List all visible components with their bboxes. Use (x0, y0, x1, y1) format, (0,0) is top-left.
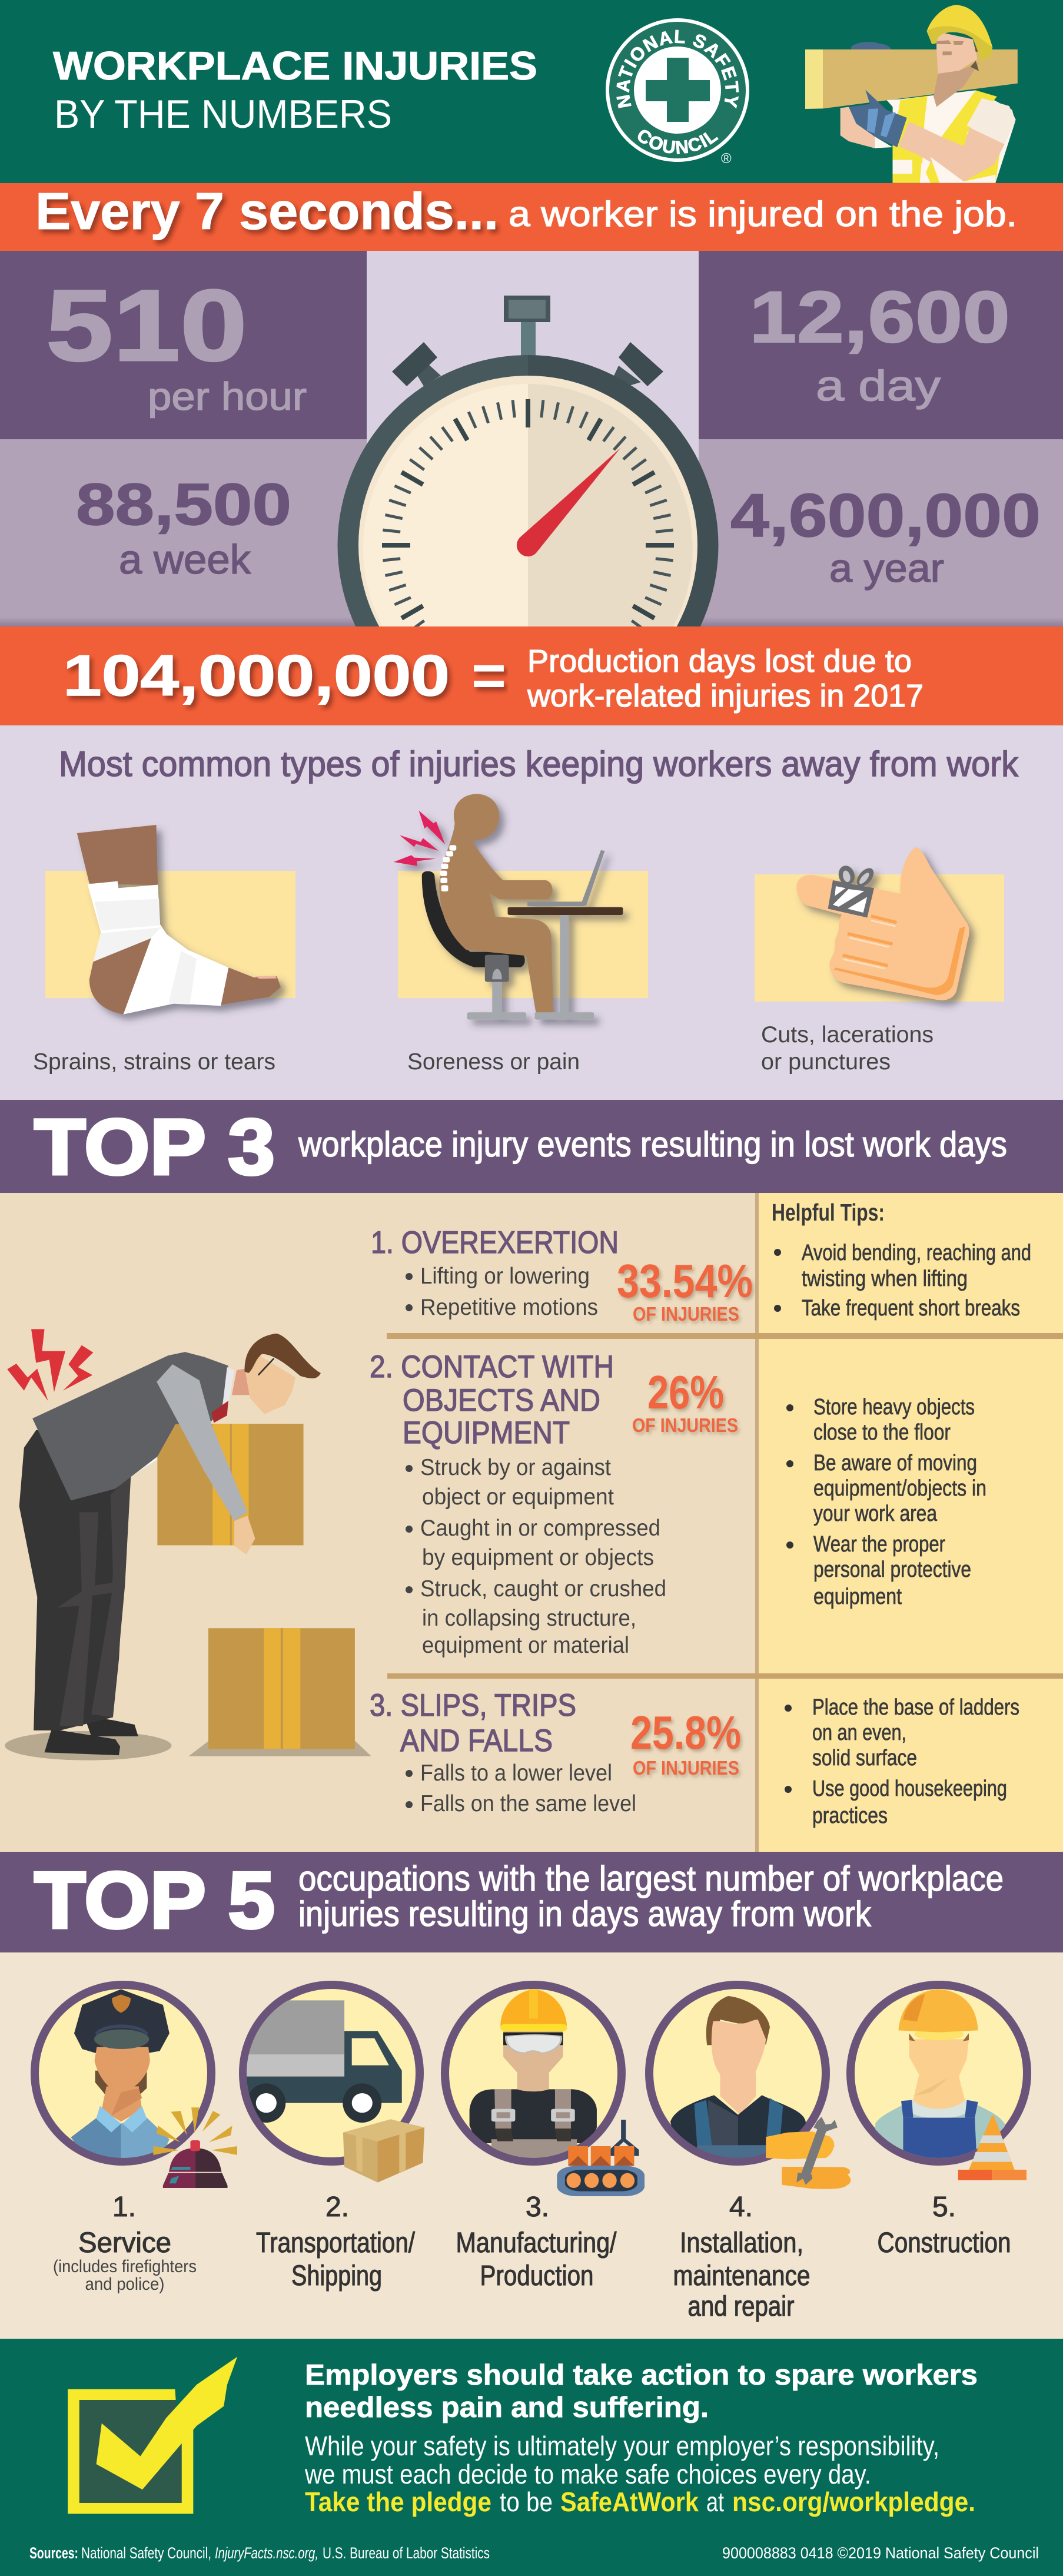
icon: service bell (153, 2107, 237, 2188)
event 2: contact with objects: object or equipment (422, 1484, 614, 1510)
event 2: contact with objects: Struck, caught or crushed (420, 1576, 666, 1602)
stat: 12,600 a day (749, 277, 1010, 410)
panel: top 5 occupations (0, 1952, 1063, 2339)
call to action text: nsc.org/workpledge. (732, 2487, 975, 2517)
heading: Most common types of injuries keeping workers away from work (59, 744, 1019, 784)
tips for overexertion: Helpful Tips: (772, 1199, 885, 1226)
stat: 510 per hour: 510 (46, 269, 247, 382)
copyright: 900008883 0418 ©2019 National Safety Council (722, 2544, 1039, 2562)
event 2: contact with objects: 26% (647, 1366, 724, 1418)
tips for contact: equipment (813, 1584, 902, 1609)
label: Shipping (291, 2260, 382, 2292)
illustration: man lifting box (5, 1329, 371, 1761)
event 3: slips, trips and falls: Falls on the same level (420, 1791, 636, 1816)
occupation 2: transportation (240, 1985, 424, 2292)
tips for overexertion: Take frequent short breaks (802, 1296, 1020, 1321)
sources: National Safety Council, (81, 2544, 211, 2562)
banner: 104,000,000 production days lost: work-related injuries in 2017 (527, 678, 924, 714)
banner: top 3: workplace injury events resulting in lost work days (298, 1125, 1007, 1164)
call to action text (304, 2359, 978, 2517)
call to action text: Take the pledge (305, 2487, 491, 2517)
event 3: slips, trips and falls: Falls to a lower level (420, 1761, 612, 1786)
tips for contact: personal protective (813, 1557, 971, 1582)
label: and repair (687, 2291, 795, 2322)
label: Production (480, 2260, 593, 2292)
tips for contact: equipment/objects in (813, 1476, 986, 1501)
icon: gloved hands with wrench (766, 2117, 851, 2189)
occupation 5: construction (851, 1985, 1027, 2259)
label: Installation, (680, 2227, 803, 2259)
sources: Sources: (29, 2544, 78, 2562)
title: WORKPLACE INJURIES (53, 44, 537, 88)
caption: cuts: Cuts, lacerations (761, 1022, 934, 1047)
logo: National Safety Council: NATIONAL SAFETY (616, 29, 739, 108)
event 1: overexertion: Repetitive motions (420, 1295, 598, 1320)
tips for slips: Use good housekeeping (812, 1776, 1007, 1801)
icon: conveyor belt (557, 2120, 645, 2196)
call to action text: While your safety is ultimately your employer’s responsibility, (305, 2431, 939, 2461)
sources (29, 2544, 490, 2562)
icon: bandaged foot (77, 825, 281, 1015)
event 1: overexertion: Lifting or lowering (420, 1264, 590, 1289)
label (256, 2192, 416, 2292)
banner: 104,000,000 production days lost: Production days lost due to (527, 644, 912, 679)
label: 2. (325, 2192, 349, 2223)
banner: every 7 seconds (0, 182, 1063, 251)
stat: 88,500 a week: 88,500 (76, 472, 291, 538)
label: Transportation/ (256, 2227, 416, 2259)
stat: 12,600 a day: 12,600 (749, 277, 1010, 358)
tips for contact: Be aware of moving (813, 1451, 977, 1476)
stat: 4,600,000 a year (730, 482, 1041, 591)
sources: InjuryFacts.nsc.org, (215, 2544, 318, 2562)
tips for contact: Store heavy objects (813, 1395, 975, 1420)
label: Construction (877, 2227, 1011, 2259)
event 1: overexertion: 1. OVEREXERTION (371, 1225, 619, 1260)
banner: top 5: injuries resulting in days away from work (298, 1894, 872, 1934)
occupation 3: manufacturing (445, 1985, 645, 2292)
stat: 12,600 a day: a day (816, 363, 941, 410)
tips for contact (786, 1395, 986, 1609)
logo: National Safety Council: COUNCIL (638, 130, 719, 154)
illustration: worker carrying beam (805, 5, 1018, 183)
label (673, 2192, 810, 2322)
helpful tips background (755, 1193, 1063, 1852)
banner: top 5: occupations with the largest number of workplace (298, 1859, 1004, 1898)
stat: 88,500 a week: a week (119, 536, 251, 582)
tips for slips: practices (812, 1803, 888, 1828)
label: 3. (526, 2192, 549, 2223)
icon background panels (45, 871, 1004, 1002)
sources: U.S. Bureau of Labor Statistics (323, 2544, 490, 2562)
panel: most common injury types (0, 725, 1063, 1100)
label (456, 2192, 617, 2292)
event 2: contact with objects: 2. CONTACT WITH (370, 1350, 614, 1384)
event 3: slips, trips and falls: AND FALLS (400, 1723, 553, 1758)
banner: top 5 (0, 1852, 1063, 1952)
event 3: slips, trips and falls (370, 1688, 741, 1816)
banner: 104,000,000 production days lost: = (471, 643, 506, 708)
label: (includes firefighters (53, 2257, 197, 2276)
banner: 104,000,000 production days lost: 104,000,000 (63, 643, 450, 708)
label: 1. (112, 2192, 136, 2223)
tips for overexertion: twisting when lifting (802, 1267, 968, 1291)
caption: cuts: or punctures (761, 1049, 891, 1075)
tips for slips: Place the base of ladders (812, 1695, 1019, 1720)
event 2: contact with objects: Caught in or compressed (420, 1516, 660, 1541)
event 2: contact with objects: OBJECTS AND (403, 1383, 600, 1418)
icon: cardboard box (343, 2119, 424, 2183)
event 2: contact with objects: OF INJURIES (632, 1414, 738, 1436)
label: 5. (932, 2192, 956, 2223)
icon: seated person with back pain (394, 794, 623, 1020)
label: maintenance (673, 2260, 810, 2292)
call to action text: we must each decide to make safe choices every day. (304, 2459, 871, 2489)
tips for slips (785, 1695, 1019, 1828)
label: Service (78, 2227, 171, 2259)
event 2: contact with objects (370, 1350, 738, 1658)
event 3: slips, trips and falls: 25.8% (630, 1706, 741, 1759)
event 2: contact with objects: EQUIPMENT (403, 1415, 570, 1450)
banner: top 3: TOP 3 (34, 1103, 275, 1191)
event 2: contact with objects: equipment or material (422, 1633, 629, 1658)
caption: cuts (761, 1022, 934, 1075)
call to action text: needless pain and suffering. (305, 2392, 709, 2424)
occupation 1: service (35, 1985, 237, 2294)
tips for slips: on an even, (812, 1720, 906, 1745)
tips for slips: solid surface (812, 1746, 917, 1771)
icon: traffic cone (958, 2116, 1027, 2180)
label (53, 2192, 197, 2294)
stat: 88,500 a week (76, 472, 291, 582)
banner: top 3 (0, 1100, 1063, 1193)
event 1: overexertion (371, 1225, 753, 1325)
occupation 4: installation (649, 1985, 851, 2322)
event 2: contact with objects: in collapsing structure, (422, 1606, 636, 1631)
banner: every 7 seconds: Every 7 seconds... (35, 182, 499, 240)
logo: National Safety Council (606, 18, 749, 167)
logo: National Safety Council: ® (721, 151, 732, 167)
event 2: contact with objects: by equipment or objects (422, 1545, 654, 1570)
panel: top 3 events (0, 1193, 1063, 1852)
panel: header (0, 0, 1063, 183)
event 2: contact with objects: Struck by or against (420, 1455, 611, 1480)
event 3: slips, trips and falls: OF INJURIES (633, 1757, 739, 1779)
call to action text: to be (500, 2487, 553, 2517)
label: and police) (85, 2275, 165, 2294)
event 1: overexertion: 33.54% (617, 1255, 753, 1307)
panel: injury rate statistics (0, 251, 1063, 626)
call to action text: at (706, 2487, 724, 2517)
icon: thumb with bandaged finger (796, 847, 969, 1000)
label: Manufacturing/ (456, 2227, 617, 2259)
tips for overexertion (772, 1199, 1031, 1321)
banner: every 7 seconds: a worker is injured on the job. (509, 194, 1017, 234)
tips for contact: Wear the proper (813, 1532, 945, 1557)
banner: 104,000,000 production days lost (0, 626, 1063, 725)
panel: call to action footer (0, 2339, 1063, 2576)
stat: 510 per hour (46, 269, 307, 418)
tips for contact: your work area (813, 1501, 938, 1526)
event 1: overexertion: OF INJURIES (633, 1303, 739, 1325)
title: BY THE NUMBERS (54, 92, 392, 137)
title (53, 44, 537, 137)
label: 4. (729, 2192, 753, 2223)
call to action text: SafeAtWork (560, 2487, 699, 2517)
stat: 510 per hour: per hour (148, 374, 307, 418)
stat: 4,600,000 a year: 4,600,000 (730, 482, 1041, 550)
tips for contact: close to the floor (813, 1420, 951, 1445)
icon: stopwatch (338, 296, 718, 626)
stat: 4,600,000 a year: a year (829, 546, 944, 591)
icon: yellow checkbox (68, 2357, 237, 2514)
banner: top 5: TOP 5 (34, 1855, 275, 1945)
call to action text: Employers should take action to spare workers (305, 2359, 978, 2391)
caption: sprains: Sprains, strains or tears (33, 1049, 275, 1075)
label (877, 2192, 1011, 2259)
caption: soreness: Soreness or pain (407, 1049, 580, 1075)
dividers (387, 1333, 1063, 1679)
event 3: slips, trips and falls: 3. SLIPS, TRIPS (370, 1688, 576, 1723)
